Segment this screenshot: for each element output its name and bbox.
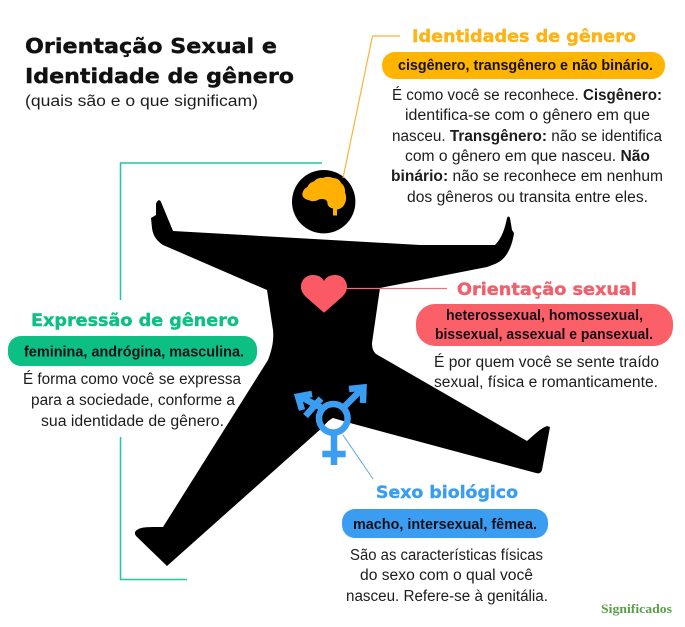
description: gender identities: dos gêneros ou transita entre eles. <box>407 189 648 206</box>
description: gender identities: É como você se reconhece. Cisgênero: <box>392 87 662 104</box>
pill: gender identity types <box>382 52 665 79</box>
description: biological sex <box>346 547 548 605</box>
body silhouette <box>135 200 550 566</box>
pill: sexual orientation types <box>416 304 673 346</box>
description: gender expression: sua identidade de gênero. <box>41 413 224 430</box>
description: gender expression: para a sociedade, conforme a <box>31 392 235 409</box>
pill text: gender expression types: feminina, andrógina, masculina. <box>24 344 244 360</box>
pill text: gender identity types: cisgênero, transgênero e não binário. <box>398 57 653 74</box>
panel: biological sex <box>342 483 548 605</box>
bracket line: gender expression <box>120 163 322 580</box>
description: gender identities: binário: não se reconhece em nenhum <box>391 168 663 185</box>
heading: sexual orientation: Orientação sexual <box>457 280 637 300</box>
panel: gender identities <box>382 27 665 206</box>
leader line: heart to sexual orientation <box>347 288 447 290</box>
title: Orientação Sexual e <box>25 34 277 58</box>
icon: head <box>292 170 355 233</box>
pill text: sexual orientation types: heterossexual, homossexual, <box>446 307 643 324</box>
description: gender identities: identifica-se com o gênero em que <box>405 107 650 124</box>
description: gender identities: com o gênero em que nasceu. Não <box>405 148 650 165</box>
pill text: sexual orientation types <box>435 307 653 343</box>
panel: sexual orientation <box>416 280 673 391</box>
leader line: brain to gender identity <box>343 36 400 178</box>
description: gender expression: É forma como você se expressa <box>23 371 241 388</box>
title: (quais são e o que significam) <box>25 93 258 110</box>
description: biological sex: São as características físicas <box>350 547 543 564</box>
pill: biological sex types <box>342 509 548 538</box>
description: sexual orientation: É por quem você se sente traído <box>434 354 659 371</box>
icon: heart <box>301 275 347 313</box>
heading: biological sex: Sexo biológico <box>376 483 518 503</box>
pill: gender expression types <box>8 336 257 366</box>
icon: transgender symbol <box>298 388 364 465</box>
heading: gender expression: Expressão de gênero <box>31 311 239 331</box>
description: sexual orientation: sexual, física e romanticamente. <box>434 374 658 391</box>
description: biological sex: do sexo com o qual você <box>360 567 533 584</box>
heading: gender identities: Identidades de gênero <box>412 27 636 47</box>
pill text: biological sex types: macho, intersexual, fêmea. <box>353 516 537 533</box>
description: gender expression <box>23 371 241 430</box>
description: sexual orientation <box>434 354 659 391</box>
description: gender identities: nasceu. Transgênero: não se identifica <box>392 128 662 145</box>
description: gender identities <box>391 87 663 206</box>
title <box>25 34 294 110</box>
credit: Significados: Significados <box>601 602 672 616</box>
title: Identidade de gênero <box>25 64 294 88</box>
icon: brain <box>302 177 346 216</box>
pill text: sexual orientation types: bissexual, assexual e pansexual. <box>435 326 653 343</box>
leader line: symbol to biological sex <box>343 435 373 479</box>
panel: gender expression <box>8 311 257 430</box>
description: biological sex: nasceu. Refere-se à genitália. <box>346 588 548 605</box>
